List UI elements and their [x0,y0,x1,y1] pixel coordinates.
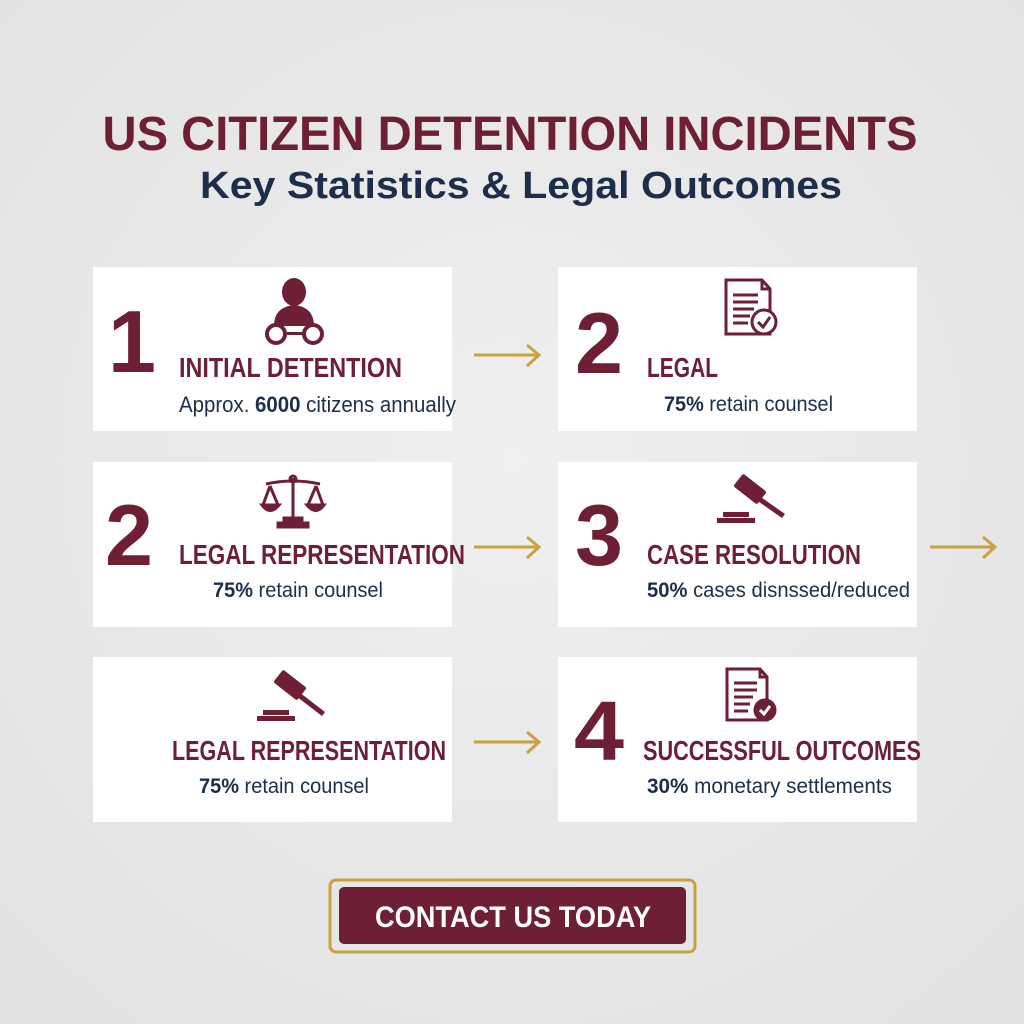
arrow [474,732,539,753]
arrow [930,537,995,558]
icon: document check [727,669,775,720]
arrow [474,537,539,558]
title: US CITIZEN DETENTION INCIDENTS [102,108,918,161]
heading: SUCCESSFUL OUTCOMES [643,735,921,766]
heading: CASE RESOLUTION [647,539,861,570]
panel: initial detention [93,267,456,431]
stat: 30% monetary settlements [647,775,892,798]
number 3: 3 [575,488,623,584]
stat: 75% retain counsel [213,579,383,602]
icon: scales [262,476,324,527]
heading: LEGAL [647,352,718,383]
number 4: 4 [574,684,624,778]
number 2: 2 [575,296,623,392]
stat: Approx. 6000 citizens annually [179,392,456,417]
icon: gavel [717,474,785,523]
button: contact us today: CONTACT US TODAY [375,901,651,934]
icon: gavel [257,670,325,721]
subtitle: Key Statistics & Legal Outcomes [200,165,842,207]
heading: LEGAL REPRESENTATION [172,735,446,766]
arrow [474,345,539,366]
panel: successful outcomes [558,657,921,822]
icon: detained person [267,278,322,343]
number 1: 1 [108,292,156,391]
panel: legal representation 2 [93,657,452,822]
stat: 75% retain counsel [664,393,833,416]
panel: case resolution [558,462,917,627]
stat: 75% retain counsel [199,775,369,798]
heading: LEGAL REPRESENTATION [179,539,465,570]
number 2: 2 [105,488,153,584]
panel: legal representation [93,462,465,627]
stat: 50% cases disnssed/reduced [647,579,910,602]
heading: INITIAL DETENTION [179,352,402,383]
button: contact us today [330,880,695,952]
icon: document check [726,280,776,334]
panel: legal [558,267,917,431]
